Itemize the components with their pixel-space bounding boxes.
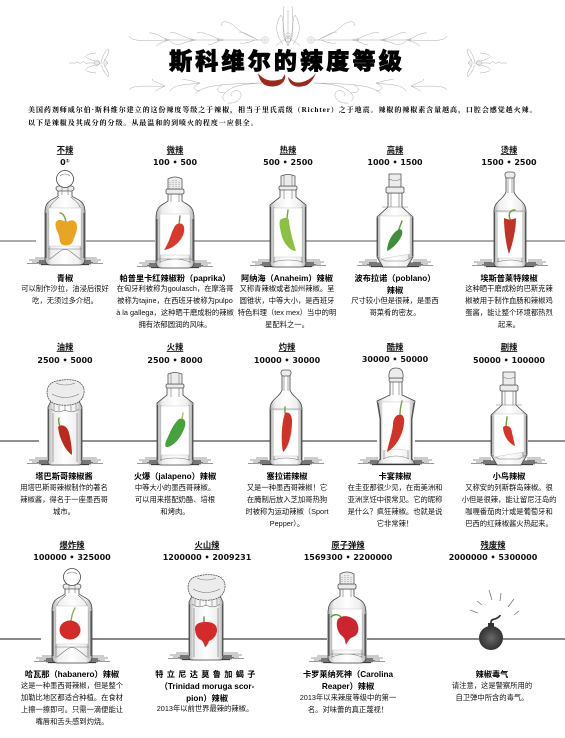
bottle: Anaheim: [250, 174, 326, 267]
description: 咖喱番茄肉汁或是葡萄牙和: [465, 507, 553, 516]
pepper name: 青椒: [57, 273, 74, 283]
heading: 爆炸辣: [60, 540, 85, 550]
range: 100000 • 325000: [33, 553, 111, 562]
description: 和烤肉。: [160, 507, 190, 516]
description: 拥有浓郁圆润的风味。: [139, 320, 211, 329]
panel: 剧辣: [462, 342, 556, 528]
description: 2013年以前世界最辣的辣椒。: [157, 704, 253, 713]
description: 被称为tajine，在西班牙被称为pulpo: [117, 296, 233, 305]
description: 可以制作沙拉，油浸后很好: [21, 284, 109, 293]
pepper name: 埃斯普莱特辣椒: [480, 273, 538, 283]
bottle: paprika: [137, 177, 213, 268]
heading: 油辣: [57, 342, 74, 352]
heading: 烫辣: [501, 145, 518, 155]
intro text: 以下是辣椒及其成分的分级。从最温和的到喷火的程度一应俱全。: [28, 118, 259, 127]
heading: 火辣: [167, 342, 184, 352]
description: [452, 681, 532, 702]
description: [462, 483, 556, 528]
bottle: Carolina Reaper: [309, 572, 385, 663]
description: 自卫弹中所含的毒气。: [456, 693, 528, 702]
bottle: cayenne: [358, 368, 434, 465]
pepper name: pion）辣椒: [186, 693, 229, 703]
title: 斯科维尔的辣度等级: [169, 48, 405, 74]
description: [116, 284, 234, 329]
panel: 原子弹辣: [300, 540, 396, 714]
description: 用塔巴斯哥辣椒制作的著名: [20, 483, 108, 492]
intro text: 美国药剂师威尔伯·斯科维尔建立的这份辣度等级之于辣椒，相当于里氏震级（Richter）之于地震。辣椒的辣椒素含量越高，口腔会感觉越火辣。: [28, 105, 537, 115]
heading: 火山辣: [195, 540, 220, 550]
bottle: bird's eye: [471, 372, 547, 465]
pepper name: 塞拉诺辣椒: [267, 471, 308, 481]
panel: 热辣: [238, 145, 336, 329]
description: Pepper）。: [270, 519, 304, 528]
row 2 timeline line: [0, 440, 565, 442]
description: [21, 284, 109, 305]
panel: 爆炸辣: [21, 540, 124, 726]
description: 在腌制后放入芝加哥热狗: [247, 495, 327, 504]
description: 起来。: [498, 320, 520, 329]
panel: 微辣: [116, 145, 234, 329]
description: 特色料理（tex mex）当中的明: [238, 308, 336, 317]
bottle: serrano: [248, 370, 324, 465]
description: 又称青辣椒或者加州辣椒。呈: [240, 284, 334, 293]
pepper name: 塔巴斯哥辣椒酱: [35, 471, 93, 481]
description: [20, 483, 108, 516]
description: 可以用来搭配奶酪、培根: [135, 495, 216, 504]
panel: 火山辣: [155, 540, 259, 713]
description: 亚洲烹饪中很常见。它的昵称: [348, 495, 442, 504]
panel: 高辣: [351, 145, 439, 317]
range: 1569300 • 2200000: [304, 553, 393, 562]
description: [245, 483, 329, 528]
bottle: bell pepper: [27, 170, 103, 265]
range: 500 • 2500: [263, 158, 313, 167]
pepper name: 波布拉诺（poblano）: [355, 273, 435, 283]
pepper name: Reaper）辣椒: [322, 681, 375, 691]
description: 加勒比地区都适合种植。在食材: [21, 693, 123, 702]
description: 请注意，这是警察所用的: [452, 681, 532, 690]
pepper name: （Trinidad moruga scor-: [160, 682, 255, 691]
heading: 残废辣: [481, 540, 506, 550]
description: 椒被用于制作血肠和辣椒鸡: [465, 296, 553, 305]
range: 1500 • 2500: [481, 158, 537, 167]
range: ①: [66, 158, 70, 164]
description: 城市。: [53, 507, 75, 516]
pepper name: 卡罗莱纳死神（Carolina: [303, 669, 393, 679]
range: 2000000 • 5300000: [449, 553, 538, 562]
pepper name: 火爆（jalapeno）辣椒: [134, 471, 217, 481]
bottle: tabasco: [27, 380, 103, 465]
description: 蛋酱，能让整个环境都热烈: [465, 308, 553, 317]
description: [465, 284, 553, 329]
description: à la gallega，这种晒干磨成粉的辣椒: [116, 308, 234, 317]
panel: 油辣: [20, 342, 108, 516]
range: 100 • 500: [153, 158, 197, 167]
range: 1200000 • 2009231: [163, 553, 252, 562]
icon: red chili mustache: [258, 73, 316, 87]
heading: 不辣: [57, 145, 74, 155]
icon: bomb: [470, 590, 519, 650]
description: 哥菜肴的密友。: [369, 308, 421, 317]
pepper name: 小鸟辣椒: [493, 471, 526, 481]
bottle: Trinidad moruga scorpion: [168, 575, 244, 660]
description: 上擦一擦即可。只需一滴便能让: [21, 705, 123, 714]
range: 10000 • 30000: [254, 356, 321, 365]
description: 吃，无须过多介绍。: [32, 296, 98, 305]
row 1 timeline line: [0, 240, 565, 242]
description: 圆锥状，中等大小，是西班牙: [240, 296, 334, 305]
description: 又称安的列斯群岛辣椒。很: [465, 483, 553, 492]
pepper name: 帕普里卡红辣椒粉（paprika）: [120, 273, 230, 283]
description: 辣椒酱，得名于一座墨西哥: [20, 495, 108, 504]
heading: 微辣: [167, 145, 184, 155]
bottle: poblano: [357, 174, 433, 267]
pepper name: 特立尼达莫鲁加蝎子: [155, 669, 259, 679]
description: 小但是很辣，能让留尼汪岛的: [462, 495, 556, 504]
description: [21, 681, 124, 726]
description: 在匈牙利被称为goulasch，在摩洛哥: [117, 284, 233, 293]
pepper name: [355, 273, 435, 295]
range: 0: [60, 158, 66, 167]
heading: 酷辣: [387, 342, 404, 352]
pepper name: 辣椒: [387, 285, 404, 295]
panel: 不辣: [21, 145, 109, 305]
pepper name: 卡宴辣椒: [379, 471, 412, 481]
bottle: habanero: [34, 568, 110, 663]
intro text: [28, 105, 537, 127]
heading: 原子弹辣: [331, 540, 365, 550]
bottle: jalapeno: [137, 372, 213, 465]
range: 1000 • 1500: [367, 158, 423, 167]
panel: 火辣: [134, 342, 217, 516]
description: [300, 693, 396, 714]
heading: 热辣: [280, 145, 297, 155]
pepper name: [303, 669, 393, 691]
range: 30000 • 50000: [362, 355, 429, 364]
description: 这是一种墨西哥辣椒，但是整个: [21, 681, 124, 690]
description: 嘴唇和舌头感到灼烧。: [36, 717, 108, 726]
description: [351, 296, 439, 317]
pepper name: 阿纳海（Anaheim）辣椒: [241, 273, 334, 283]
description: 名。对味蕾的真正蔑视！: [308, 705, 388, 714]
panel: 烫辣: [465, 145, 553, 329]
description: 巴西的红辣椒酱火热起来。: [465, 519, 553, 528]
description: 又是一种墨西哥辣椒！它: [247, 483, 327, 492]
pepper name: [155, 669, 259, 703]
pepper name: 哈瓦那（habanero）辣椒: [25, 669, 120, 679]
description: [238, 284, 336, 329]
description: 它非常辣！: [377, 519, 413, 528]
row 3 timeline line: [0, 638, 565, 640]
description: 星配料之一。: [265, 320, 309, 329]
heading: 剧辣: [501, 342, 518, 352]
header ornament: [69, 6, 507, 103]
bottle: Basque chili: [472, 172, 548, 267]
description: 在圭亚那很少见，在南美洲和: [348, 483, 442, 492]
pepper name: 辣椒毒气: [476, 669, 508, 679]
description: [135, 483, 216, 516]
heading: 灼辣: [279, 342, 296, 352]
panel: 灼辣: [245, 342, 329, 528]
panel: 酷辣: [348, 342, 442, 528]
range: 50000 • 100000: [473, 356, 545, 365]
description: 时被称为运动辣椒（Sport: [245, 507, 329, 516]
description: 中等大小的墨西哥辣椒。: [135, 483, 215, 492]
panel: 残废辣: [449, 540, 538, 702]
description: [348, 483, 442, 528]
description: 尺寸较小但是很辣，是墨西: [351, 296, 439, 305]
range: 2500 • 8000: [147, 356, 203, 365]
description: 是什么？疯狂辣椒。也就是说: [348, 507, 442, 516]
description: 2013年以来辣度等级中的第一: [300, 693, 396, 702]
range: 2500 • 5000: [37, 356, 93, 365]
heading: 高辣: [387, 145, 404, 155]
description: 这种晒干磨成粉的巴斯克辣: [465, 284, 553, 293]
